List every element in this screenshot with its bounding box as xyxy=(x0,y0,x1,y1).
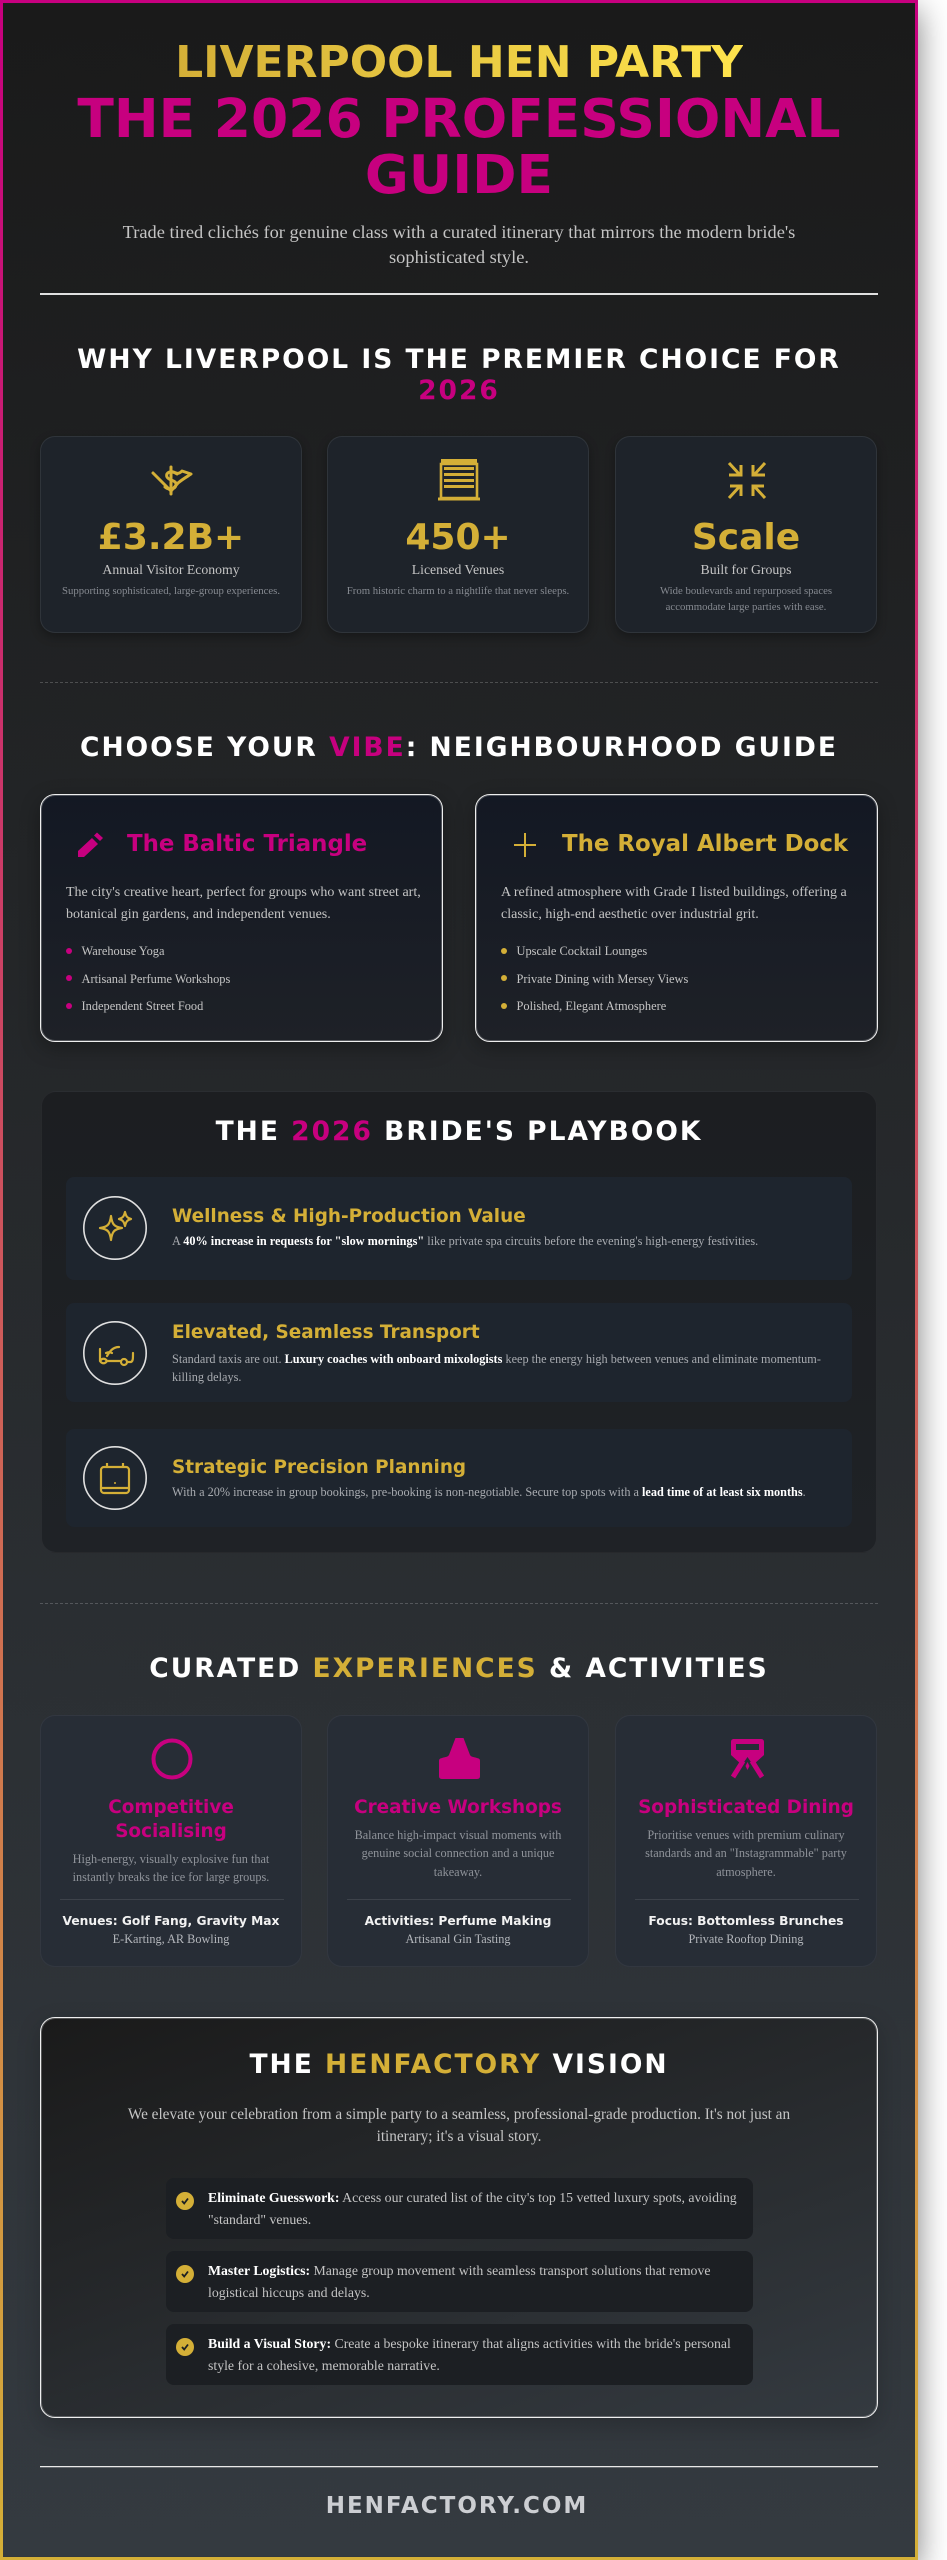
neighbourhood description: classic, high-end aesthetic over industrial grit. xyxy=(501,906,759,922)
card secondary: Artisanal Gin Tasting xyxy=(405,1932,511,1946)
vision item: logistics xyxy=(166,2251,753,2312)
stat description: Supporting sophisticated, large-group experiences. xyxy=(62,585,280,597)
title: The 2026 Professional Guide xyxy=(77,87,841,206)
neighbourhood description: botanical gin gardens, and independent venues. xyxy=(66,906,331,922)
card: competitive socialising xyxy=(40,1715,302,1967)
subtitle: Trade tired clichés for genuine class with a curated itinerary that mirrors the modern bride's xyxy=(123,222,795,242)
stat value: 450+ xyxy=(405,517,511,558)
playbook item: transport xyxy=(66,1303,852,1402)
card description: genuine social connection and a unique xyxy=(362,1846,554,1860)
list: highlights: Private Dining with Mersey Views xyxy=(516,972,688,986)
stat description xyxy=(660,585,832,612)
icon: check xyxy=(176,2338,194,2356)
item text xyxy=(208,2190,737,2226)
list: highlights: Warehouse Yoga xyxy=(82,944,164,958)
card title xyxy=(108,1796,234,1842)
neighbourhood description xyxy=(501,885,847,922)
neighbourhood description xyxy=(66,885,421,922)
item text: Build a Visual Story: Create a bespoke itinerary that aligns activities with the bride's personal xyxy=(208,2336,731,2351)
card description xyxy=(355,1828,562,1879)
icon: calendar xyxy=(83,1446,147,1510)
card description: High-energy, visually explosive fun that xyxy=(73,1852,269,1866)
item text: Eliminate Guesswork: Access our curated list of the city's top 15 vetted luxury spots, avoiding xyxy=(208,2190,737,2205)
item title: Elevated, Seamless Transport xyxy=(172,1322,480,1343)
icon: car xyxy=(83,1321,147,1385)
stat value: Scale xyxy=(692,517,800,558)
card title: Creative Workshops xyxy=(354,1796,562,1818)
panel: Henfactory vision xyxy=(40,2017,878,2418)
vision intro: itinerary; it's a visual story. xyxy=(377,2128,541,2145)
heading: why Liverpool xyxy=(77,344,841,406)
item text: logistical hiccups and delays. xyxy=(208,2284,370,2300)
list: highlights xyxy=(66,944,230,1013)
stat label: Annual Visitor Economy xyxy=(102,562,240,577)
heading: choose your vibe: CHOOSE YOUR VIBE: NEIGHBOURHOOD GUIDE xyxy=(80,732,838,763)
item text: killing delays. xyxy=(172,1370,241,1384)
stat description: accommodate large parties with ease. xyxy=(666,600,826,612)
playbook item: wellness xyxy=(66,1177,852,1280)
card highlight: Activities: Perfume Making xyxy=(365,1914,551,1928)
item text: style for a cohesive, memorable narrative. xyxy=(208,2358,440,2372)
card title: Competitive xyxy=(108,1796,234,1818)
title: The 2026 Professional Guide: THE 2026 PROFESSIONAL xyxy=(77,87,841,150)
heading: curated experiences: CURATED EXPERIENCES & ACTIVITIES xyxy=(149,1653,769,1684)
card description: Prioritise venues with premium culinary xyxy=(647,1828,845,1842)
item text xyxy=(208,2336,731,2373)
panel: Royal Albert Dock xyxy=(475,794,878,1042)
title: Liverpool Hen Party: LIVERPOOL HEN PARTY xyxy=(175,37,743,88)
card description: standards and an "Instagrammable" party xyxy=(645,1846,847,1860)
icon: bottle xyxy=(439,1738,480,1779)
playbook item: planning xyxy=(66,1429,852,1527)
card description: instantly breaks the ice for large groups. xyxy=(73,1870,269,1884)
card: sophisticated dining xyxy=(615,1715,877,1967)
subtitle xyxy=(122,222,795,267)
subtitle: sophisticated style. xyxy=(389,247,529,267)
icon: check xyxy=(176,2265,194,2283)
stat card: licensed venues xyxy=(327,436,589,633)
card: creative workshops xyxy=(327,1715,589,1967)
card secondary: Private Rooftop Dining xyxy=(688,1932,804,1946)
neighbourhood title: The Baltic Triangle xyxy=(127,831,367,857)
neighbourhood description: The city's creative heart, perfect for groups who want street art, xyxy=(66,885,421,900)
heading: why Liverpool: WHY LIVERPOOL IS THE PREMIER CHOICE FOR xyxy=(77,344,841,374)
icon: venue building xyxy=(438,459,480,500)
icon: check xyxy=(176,2192,194,2210)
icon: ring xyxy=(152,1738,192,1780)
vision item: guesswork xyxy=(166,2178,753,2239)
heading: why Liverpool: 2026 xyxy=(418,374,500,406)
neighbourhood description: A refined atmosphere with Grade I listed buildings, offering a xyxy=(501,885,847,900)
icon: dining xyxy=(730,1739,764,1778)
vision item: visual story xyxy=(166,2324,753,2385)
list: highlights: Artisanal Perfume Workshops xyxy=(82,972,230,986)
item title: Wellness & High-Production Value xyxy=(172,1206,526,1226)
heading: playbook: THE 2026 BRIDE'S PLAYBOOK xyxy=(216,1116,702,1147)
item text xyxy=(172,1352,821,1384)
item text: A 40% increase in requests for "slow mornings" like private spa circuits before the evening's high-energy festivities. xyxy=(172,1234,758,1248)
stat label: Licensed Venues xyxy=(412,562,504,577)
card description: atmosphere. xyxy=(716,1865,776,1879)
icon: dollar tag xyxy=(151,466,193,496)
list: highlights: Polished, Elegant Atmosphere xyxy=(516,999,666,1013)
neighbourhood title: The Royal Albert Dock xyxy=(562,831,848,857)
item text: Standard taxis are out. Luxury coaches with onboard mixologists keep the energy high between venues and eliminate momentum- xyxy=(172,1352,821,1366)
vision intro: We elevate your celebration from a simple party to a seamless, professional-grade production. It's not just an xyxy=(128,2106,790,2123)
panel: bride's playbook xyxy=(41,1091,877,1553)
card title: Socialising xyxy=(115,1821,227,1842)
panel: Baltic Triangle xyxy=(40,794,443,1042)
item text: "standard" venues. xyxy=(208,2212,311,2226)
list: highlights xyxy=(501,944,688,1013)
vision intro xyxy=(128,2106,790,2145)
list: highlights: Independent Street Food xyxy=(82,999,203,1013)
title: The 2026 Professional Guide: GUIDE xyxy=(365,143,553,206)
card description: Balance high-impact visual moments with xyxy=(355,1828,561,1842)
icon: arrows inward xyxy=(728,462,766,499)
card title: Sophisticated Dining xyxy=(638,1796,854,1818)
card highlight: Venues: Golf Fang, Gravity Max xyxy=(63,1914,279,1928)
card description xyxy=(72,1852,270,1884)
list: highlights: Upscale Cocktail Lounges xyxy=(516,944,647,958)
card secondary: E-Karting, AR Bowling xyxy=(113,1932,229,1946)
item text: Master Logistics: Manage group movement with seamless transport solutions that remove xyxy=(208,2263,710,2278)
stat value: £3.2B+ xyxy=(98,517,244,558)
item text xyxy=(208,2263,710,2300)
icon: plus xyxy=(514,833,536,857)
stat card: scale xyxy=(615,436,877,633)
item title: Strategic Precision Planning xyxy=(172,1457,466,1478)
card description xyxy=(645,1828,847,1879)
footer: website: HENFACTORY.COM xyxy=(326,2493,588,2519)
item text: With a 20% increase in group bookings, pre-booking is non-negotiable. Secure top spots with a lead time of at least six months. xyxy=(172,1485,806,1499)
stat description: Wide boulevards and repurposed spaces xyxy=(660,585,832,597)
card description: takeaway. xyxy=(434,1865,482,1879)
heading: vision: THE HENFACTORY VISION xyxy=(249,2049,669,2080)
card highlight: Focus: Bottomless Brunches xyxy=(648,1914,844,1928)
stat description: From historic charm to a nightlife that never sleeps. xyxy=(347,585,569,597)
icon: pencil xyxy=(78,832,103,857)
stat card: visitor economy xyxy=(40,436,302,633)
icon: sparkles xyxy=(83,1196,147,1260)
stat label: Built for Groups xyxy=(701,562,791,577)
